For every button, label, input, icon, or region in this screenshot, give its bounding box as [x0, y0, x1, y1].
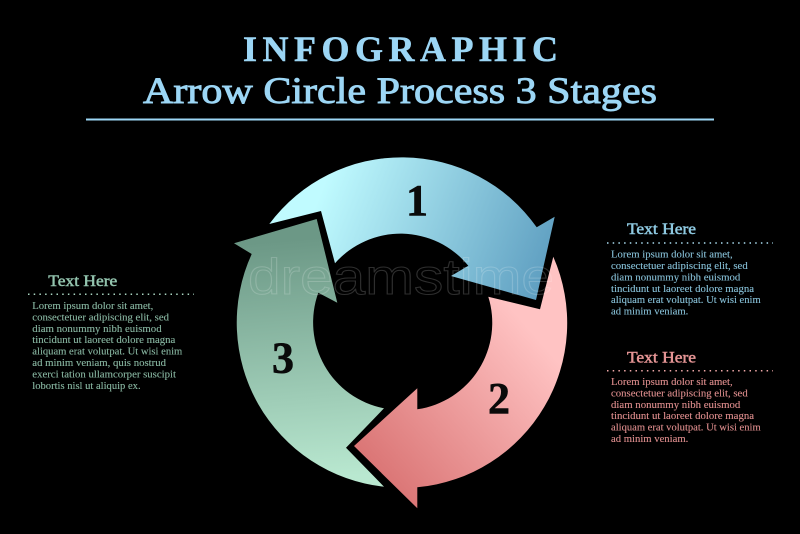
body: stage 1: aliquam erat volutpat. Ut wisi enim [611, 295, 761, 306]
arrow 1: blue [269, 157, 555, 300]
body: stage 1: diam nonummy nibh euismod [611, 272, 740, 283]
title: INFOGRAPHIC [243, 29, 558, 69]
watermark: dreamstime [248, 249, 554, 305]
body: stage 2: consectetuer adipiscing elit, sed [611, 388, 748, 399]
body: stage 1 [611, 250, 761, 318]
arrow 2: red [354, 257, 567, 508]
body: stage 2 [611, 377, 761, 445]
body: stage 1: ad minim veniam. [611, 307, 688, 318]
body: stage 1: tincidunt ut laoreet dolore magna [611, 284, 755, 295]
body: stage 3: Lorem ipsum dolor sit amet, [32, 301, 153, 312]
body: stage 1: consectetuer adipiscing elit, sed [611, 261, 748, 272]
text block: stage 2 [607, 349, 773, 445]
number 2: 2 [488, 374, 510, 423]
title: Arrow Circle Process 3 Stages [143, 71, 657, 112]
body: stage 3: exerci tation ullamcorper suscipit [32, 369, 176, 380]
body: stage 2: tincidunt ut laoreet dolore magna [611, 411, 755, 422]
body: stage 3: diam nonummy nibh euismod [32, 324, 162, 335]
text block: stage 1 [607, 221, 773, 318]
heading: stage 2: Text Here [627, 349, 696, 366]
body: stage 3: lobortis nisl ut aliquip ex. [32, 381, 141, 392]
number 3: 3 [272, 334, 294, 382]
body: stage 2: Lorem ipsum dolor sit amet, [611, 377, 733, 388]
body: stage 1: Lorem ipsum dolor sit amet, [611, 250, 733, 260]
body: stage 3: aliquam erat volutpat. Ut wisi enim [32, 347, 183, 358]
body: stage 2: aliquam erat volutpat. Ut wisi enim [611, 423, 761, 434]
body: stage 3: tincidunt ut laoreet dolore magna [32, 335, 176, 346]
title underline [86, 118, 714, 120]
number 1: 1 [406, 176, 428, 225]
heading: stage 3: Text Here [48, 273, 117, 290]
title [143, 29, 657, 112]
arrow 3: green [234, 219, 384, 487]
text block: stage 3 [28, 273, 194, 392]
body: stage 2: ad minim veniam. [611, 434, 688, 445]
body: stage 2: diam nonummy nibh euismod [611, 400, 740, 411]
body: stage 3 [32, 301, 183, 392]
body: stage 3: consectetuer adipiscing elit, sed [32, 312, 169, 323]
heading: stage 1: Text Here [627, 221, 696, 238]
body: stage 3: ad minim veniam, quis nostrud [32, 358, 166, 369]
